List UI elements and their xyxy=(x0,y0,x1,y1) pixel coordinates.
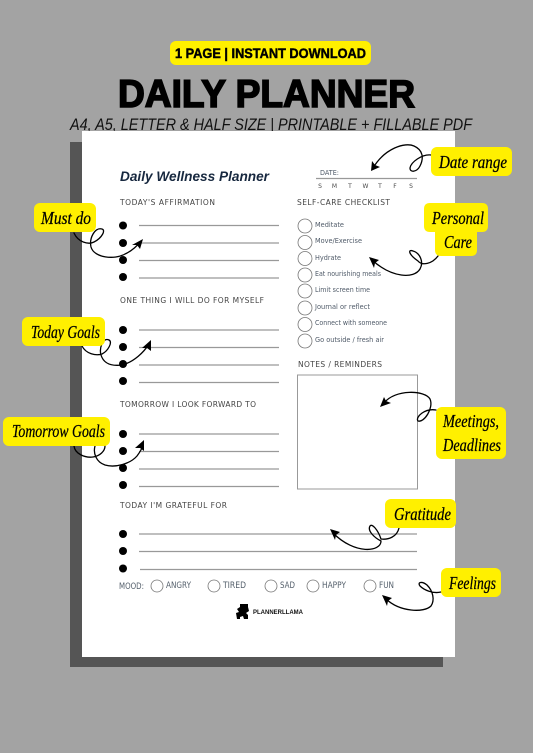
callout: meetings, deadlines: Meetings, xyxy=(442,411,499,431)
logo: plannerllama xyxy=(236,604,303,619)
section: self-care checklist: Go outside / fresh air xyxy=(315,335,384,344)
section: self-care checklist: Journal or reflect xyxy=(314,302,370,311)
page shadow xyxy=(70,142,443,667)
callout: feelings: Feelings xyxy=(448,573,496,593)
date field: S xyxy=(409,183,413,190)
mood row: ANGRY xyxy=(166,581,192,591)
callout: personal care: Care xyxy=(444,232,472,252)
section: self-care checklist: Limit screen time xyxy=(315,285,370,294)
callout: meetings, deadlines xyxy=(436,407,506,459)
callout: must do: Must do xyxy=(40,208,91,228)
section: notes and reminders xyxy=(298,360,418,489)
section: self-care checklist: SELF-CARE CHECKLIST xyxy=(297,198,390,207)
mood row: FUN xyxy=(379,581,394,591)
section: self-care checklist: Meditate xyxy=(315,220,344,229)
arrow: feelings xyxy=(382,582,441,610)
date field: F xyxy=(393,183,397,190)
date field xyxy=(316,168,417,190)
arrow: must do xyxy=(74,229,143,257)
section: today's affirmation: TODAY'S AFFIRMATION xyxy=(119,198,215,207)
arrow: today goals xyxy=(82,339,151,365)
section: tomorrow i look forward to: TOMORROW I LOOK FORWARD TO xyxy=(119,400,256,409)
callout: date range xyxy=(431,147,512,176)
callout: tomorrow goals xyxy=(3,417,110,446)
callout: must do xyxy=(34,203,96,232)
section: self-care checklist: Eat nourishing meals xyxy=(315,269,381,278)
callout: meetings, deadlines: Deadlines xyxy=(442,435,501,455)
callout: gratitude: Gratitude xyxy=(394,504,451,524)
badge: 1 page instant download xyxy=(170,41,371,65)
date field: W xyxy=(363,183,369,190)
section: self-care checklist: Move/Exercise xyxy=(315,236,362,245)
mood row: SAD xyxy=(280,581,295,591)
mood row xyxy=(119,580,394,592)
planner page xyxy=(82,131,455,657)
callout: today goals xyxy=(22,317,105,346)
date field: S xyxy=(318,183,322,190)
section: today's affirmation xyxy=(119,198,279,281)
planner heading: Daily Wellness Planner xyxy=(120,169,270,184)
mood row: TIRED xyxy=(222,581,246,591)
section: self-care checklist xyxy=(297,198,390,348)
arrow: gratitude xyxy=(330,525,399,549)
badge: 1 page instant download: 1 PAGE | INSTANT DOWNLOAD xyxy=(175,45,366,61)
section: one thing i will do for myself: ONE THING I WILL DO FOR MYSELF xyxy=(120,296,264,305)
callout: feelings xyxy=(441,568,501,597)
callout: personal care xyxy=(424,203,488,256)
callout: today goals: Today Goals xyxy=(31,322,100,342)
section: one thing i will do for myself xyxy=(119,296,279,385)
date field: T xyxy=(377,183,382,190)
arrow: personal care xyxy=(369,251,438,275)
section: self-care checklist: Connect with someone xyxy=(315,318,387,327)
section: self-care checklist: Hydrate xyxy=(315,253,341,262)
mood row: HAPPY xyxy=(322,581,347,591)
subtitle: A4, A5, LETTER & HALF SIZE | PRINTABLE + FILLABLE PDF xyxy=(69,115,473,134)
callout: date range: Date range xyxy=(438,152,507,172)
date field: DATE: xyxy=(320,168,339,177)
date field: T xyxy=(347,183,352,190)
mood row: MOOD: xyxy=(119,582,144,592)
section: today i'm grateful for: TODAY I'M GRATEFUL FOR xyxy=(119,501,227,510)
logo: plannerllama: PLANNERLLAMA xyxy=(253,609,303,616)
callout: personal care: Personal xyxy=(431,208,484,228)
callout: gratitude xyxy=(385,499,456,528)
section: today i'm grateful for xyxy=(119,501,417,572)
section: notes and reminders: NOTES / REMINDERS xyxy=(298,360,382,369)
arrow: meetings and deadlines xyxy=(380,392,436,421)
title: DAILY PLANNER xyxy=(118,73,415,116)
date field: M xyxy=(332,183,337,190)
arrow: date range xyxy=(371,145,431,171)
section: tomorrow i look forward to xyxy=(119,400,279,489)
arrow: tomorrow goals xyxy=(74,440,144,466)
callout: tomorrow goals: Tomorrow Goals xyxy=(12,421,105,441)
